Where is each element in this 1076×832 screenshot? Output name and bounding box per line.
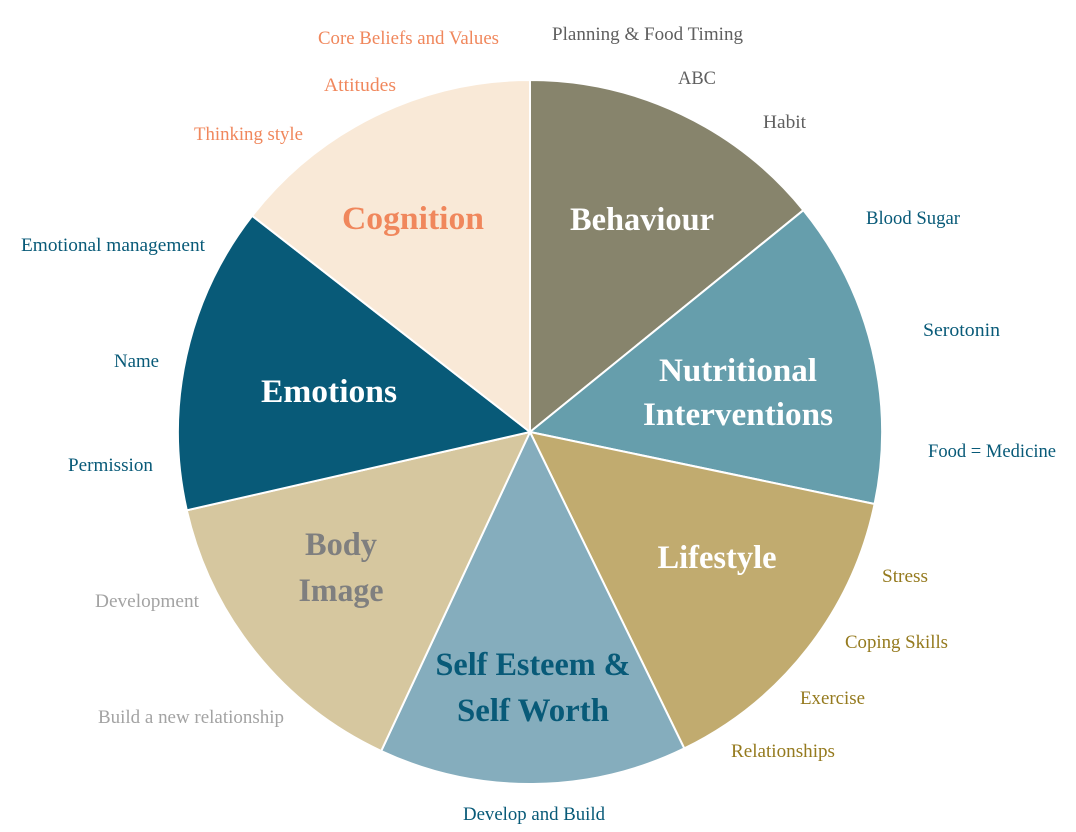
labels: body image: Build a new relationship [98,707,284,728]
labels: emotions [21,235,206,476]
labels: lifestyle: Exercise [800,688,865,709]
labels: emotions: Permission [68,455,154,476]
labels: cognition: Core Beliefs and Values [318,28,499,49]
labels: body image: Development [95,591,200,612]
labels: lifestyle [731,566,948,762]
labels: lifestyle: Relationships [731,741,835,762]
wedge: cognition [252,80,530,432]
wedge: emotions [178,216,530,510]
heading: self esteem and self worth: Self Worth [457,693,609,729]
labels: emotions: Name [114,351,159,372]
wedge: lifestyle [530,432,875,748]
labels: nutritional interventions [866,208,1056,462]
heading: body image: Image [298,573,384,609]
heading: lifestyle: Lifestyle [658,540,776,576]
heading: self esteem and self worth: Self Esteem & [436,647,630,683]
labels: nutritional interventions: Food = Medicine [928,441,1056,462]
labels: nutritional interventions: Serotonin [923,320,1001,341]
labels: cognition: Thinking style [194,124,303,145]
labels: emotions: Emotional management [21,235,206,256]
heading: cognition: Cognition [342,201,484,237]
labels: nutritional interventions: Blood Sugar [866,208,961,229]
labels: cognition [194,28,499,145]
labels: body image [95,591,284,728]
labels: behaviour: Habit [763,112,807,133]
heading: emotions: Emotions [261,374,397,410]
heading: nutritional interventions: Nutritional [659,353,817,389]
labels: behaviour [552,24,807,133]
labels: lifestyle: Stress [882,566,928,587]
labels: lifestyle: Coping Skills [845,632,948,653]
wedge: behaviour [530,80,803,432]
labels: cognition: Attitudes [324,75,396,96]
label: self esteem: Develop and Build [463,804,605,825]
labels: behaviour: ABC [678,68,716,89]
heading: behaviour: Behaviour [570,202,714,238]
pie chart [178,80,882,784]
heading: body image: Body [305,527,377,563]
heading: body image [298,527,384,609]
wedge: body image [187,432,530,751]
heading: self esteem and self worth [436,647,630,729]
heading: nutritional interventions: Interventions [643,397,833,433]
wedge: nutritional interventions [530,210,882,504]
wedge: self esteem and self worth [381,432,684,784]
heading: nutritional interventions [643,353,833,433]
labels: behaviour: Planning & Food Timing [552,24,743,45]
